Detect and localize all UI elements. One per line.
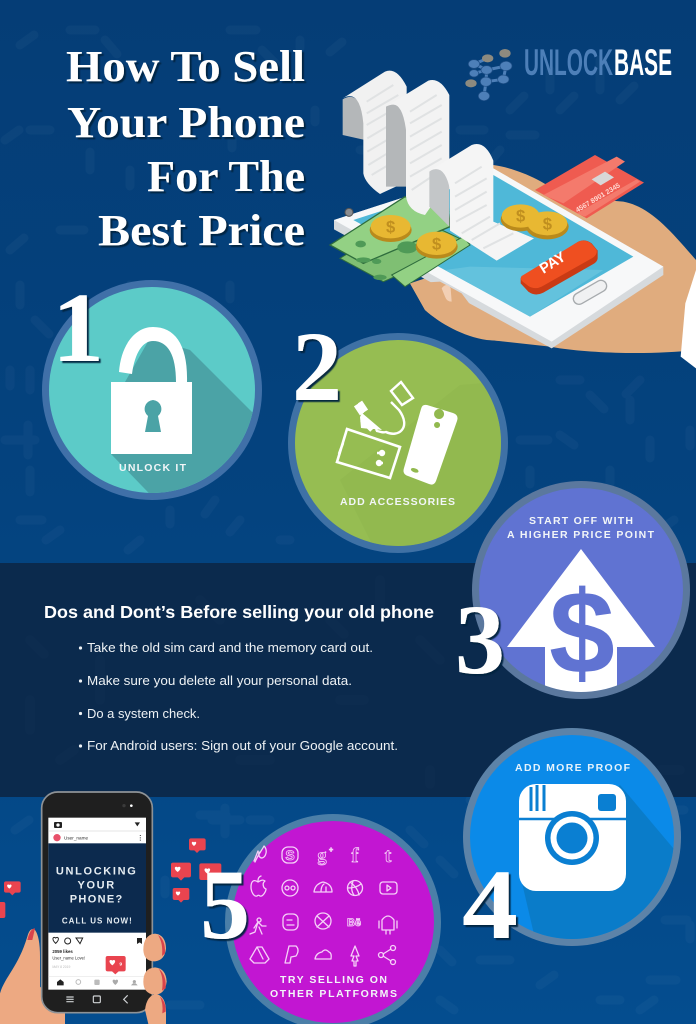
icon grid: social platforms: g [318,845,326,865]
circle [476,484,686,696]
phone ad text [56,866,137,925]
icon: battery [337,429,400,478]
list: dos and donts: For Android users: Sign out of your Google account. [87,738,398,753]
step 5: other platforms [228,818,438,1024]
icon: dollar sign: $ [549,567,615,699]
pay button: PAY [537,249,569,277]
notification hearts [0,838,221,918]
phone ad text: YOUR [77,880,116,892]
soft shadow [372,384,501,546]
receipt strip 2 [386,80,449,215]
credit card [535,155,644,218]
shirt cuff [681,270,696,368]
icon grid: social platforms: + [329,847,333,854]
icon: camera [519,784,626,891]
title: Best Price [98,206,305,255]
label line two: OTHER PLATFORMS [270,988,397,1000]
post details: User_name Love! [52,956,85,961]
title: Your Phone [67,98,305,147]
list: dos and donts [79,640,398,753]
icon grid: social platforms: S [285,847,295,863]
hand palm [0,929,65,1024]
hero illustration: hand, phone, receipts, money [330,71,696,368]
title: How To Sell [66,42,305,91]
label: ADD MORE PROOF [515,762,631,774]
icon grid: social platforms: Bē [347,917,361,929]
post details: 2059 likes [52,949,73,954]
app top bar: User_name [64,836,88,841]
label: UNLOCK IT [119,462,187,474]
coins: $ [543,214,553,233]
icon grid: social platforms [250,843,397,966]
nav buttons [66,995,128,1003]
circle [292,336,504,550]
receipt strip 3 [429,144,534,261]
receipt strip 1 [343,71,407,194]
credit card: 4567 8901 2345 [575,182,622,214]
step numbers: 2 [292,311,342,422]
post details: MAY 8 2019 [52,965,70,969]
phone ad text: CALL US NOW! [62,916,133,925]
phone body [334,168,663,348]
list: dos and donts: Do a system check. [87,706,200,721]
panel: dark band dos and donts [0,563,696,797]
step 2: add accessories [292,336,520,560]
label: ADD ACCESSORIES [340,496,455,508]
long shadow [111,341,252,493]
phone screen [48,818,146,990]
icon grid: social platforms: t [385,845,392,867]
dos and donts heading: Dos and Dont’s Before selling your old phone [44,602,434,622]
bottom left phone in hand [0,792,221,1024]
pay button [521,240,598,294]
thumb front [410,282,522,342]
icon: arrow up [507,549,655,700]
post details [48,937,146,985]
step numbers [52,272,518,960]
coins [370,204,569,259]
home button [571,278,609,306]
list: dos and donts: Take the old sim card and the memory card out. [87,640,373,655]
step 4: add more proof [466,732,696,960]
fingers [143,934,167,1024]
step numbers: 1 [52,272,104,383]
step numbers: 5 [200,849,250,960]
logo: unlockbase [465,42,613,101]
title: For The [147,152,305,201]
step 3: higher price point [476,484,686,700]
coins: $ [516,207,526,226]
step 1: unlock it [46,284,265,520]
long shadow [522,785,674,939]
icon grid: social platforms: f [352,843,360,867]
coins: $ [386,218,396,237]
money [330,197,470,287]
big heart notification: 9 [119,961,122,967]
label: START OFF WITH [529,515,633,527]
step numbers: 4 [462,849,518,960]
circle [466,732,678,942]
circle [228,818,438,1024]
coins: $ [432,234,442,253]
phone body [42,792,152,1013]
label line two: A HIGHER PRICE POINT [507,529,655,541]
icon: cable and charger [376,382,413,465]
icon: open padlock [111,327,192,454]
phone ad text: UNLOCKING [56,866,137,878]
title [66,42,305,255]
label: TRY SELLING ON [280,974,387,986]
icon: number graph [465,49,512,101]
phone screen [353,175,633,317]
list: dos and donts: Make sure you delete all your personal data. [87,673,352,688]
phone ad text: PHONE? [70,893,124,905]
hand behind phone [410,165,696,353]
circle [46,284,258,496]
logo wordmark: UNLOCK [524,42,613,83]
step numbers: 3 [455,584,505,695]
icon: phone back [404,405,458,485]
app top bar [48,822,146,841]
